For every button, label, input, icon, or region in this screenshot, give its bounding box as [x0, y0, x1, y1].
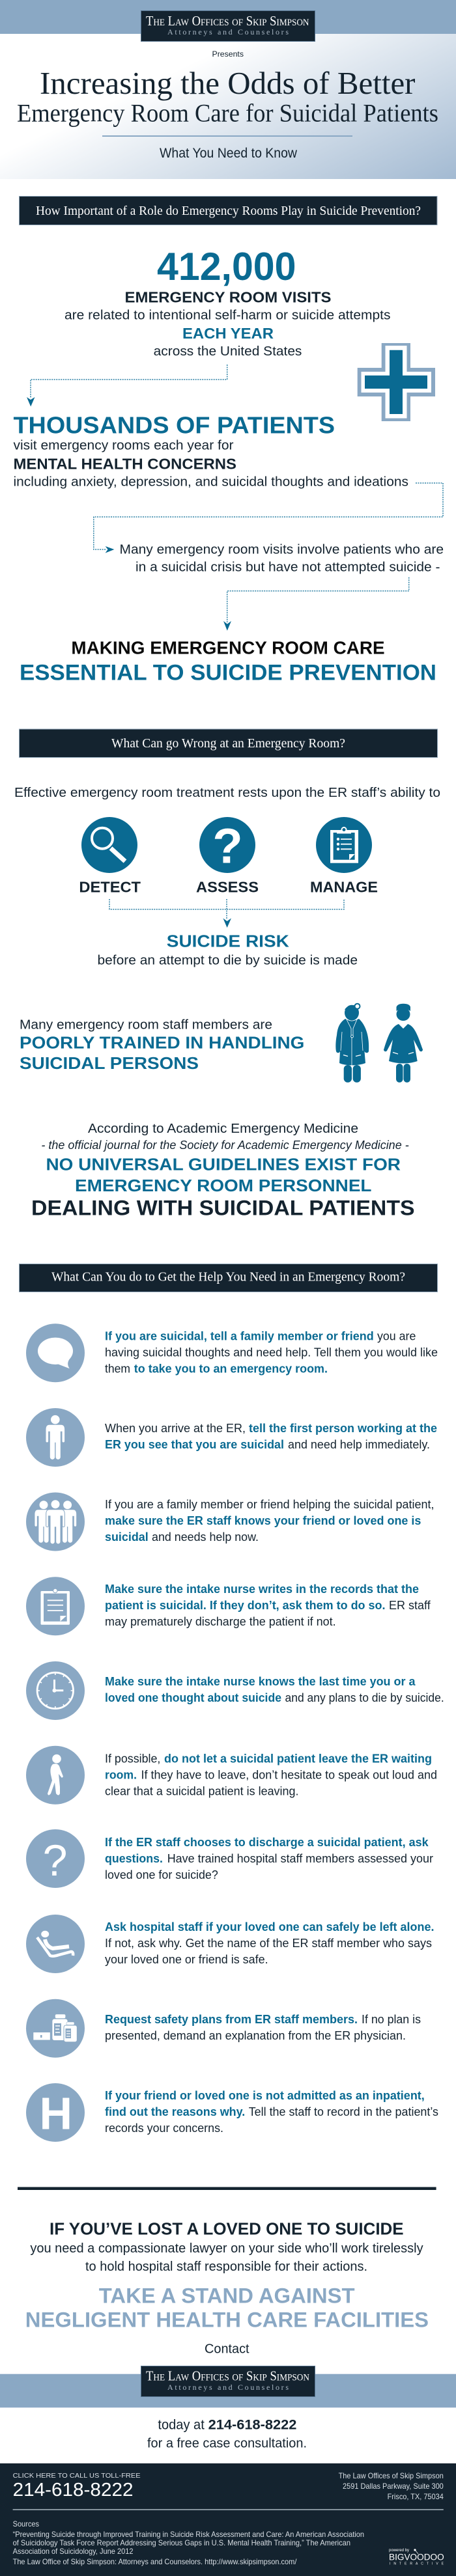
step 6: do not let patient leave [26, 1746, 437, 1805]
contact phone text: for a free case consultation. [147, 2437, 307, 2451]
section heading: what can go wrong: What Can go Wrong at an Emergency Room? [111, 736, 345, 751]
icon: nurse [384, 1004, 423, 1083]
step 3 text: suicidal [105, 1530, 149, 1544]
step 6 text: clear that a suicidal patient is leaving. [105, 1784, 298, 1797]
step 3 text [105, 1498, 434, 1544]
section heading: what can go wrong [20, 729, 438, 758]
step 10 text: If your friend or loved one is not admitted as an inpatient, [105, 2089, 425, 2102]
main title: Emergency Room Care for Suicidal Patients [17, 100, 438, 128]
logo: law offices: Attorneys and Counselors [167, 27, 289, 36]
step 3 text: and needs help now. [152, 1530, 259, 1544]
contact phone text: 214-618-8222 [208, 2418, 296, 2433]
step 10 text: Tell the staff to record in the patient’s [249, 2105, 438, 2118]
text: suicide risk: SUICIDE RISK [167, 931, 289, 950]
stat: 412,000 visits: across the United States [154, 344, 302, 359]
step 9: safety plans [26, 1999, 421, 2058]
section heading: what can you do [20, 1264, 438, 1292]
call to action text: Contact [205, 2342, 249, 2357]
step 4 text [105, 1583, 431, 1628]
step 2 text: tell the first person working at the [249, 1422, 437, 1435]
step 1 text: If you are suicidal, tell a family member or friend [105, 1329, 374, 1342]
step 1 text: you are [377, 1329, 416, 1342]
toll-free phone [13, 2472, 141, 2500]
address [339, 2471, 444, 2501]
step 6 text [105, 1752, 437, 1797]
step 2 text [105, 1422, 437, 1451]
icon: speech bubble [26, 1323, 85, 1382]
step 6 text: If they have to leave, don’t hesitate to speak out loud and [141, 1768, 437, 1781]
icon: assess question mark [199, 817, 255, 874]
step 1 text: having suicidal thoughts and need help. Tell them you would like [105, 1346, 438, 1359]
toll-free phone: 214-618-8222 [13, 2480, 133, 2500]
text: suicide risk [98, 931, 358, 968]
arrow: patients to crisis note [94, 483, 443, 553]
subtitle: What You Need to Know [160, 146, 298, 161]
icon: hospital letter H: H [40, 2088, 72, 2139]
sources: Association of Suicidology, June 2012 [13, 2547, 134, 2556]
stat: thousands of patients: including anxiety, depression, and suicidal thoughts and ideations [13, 475, 408, 490]
step 2 text: and need help immediately. [288, 1438, 430, 1451]
icon: doctor [335, 1004, 369, 1083]
logo: big voodoo interactive: BIGVOODOO [389, 2552, 444, 2562]
step 7 text: If the ER staff chooses to discharge a suicidal patient, ask [105, 1836, 429, 1849]
stat: 412,000 visits: EACH YEAR [182, 325, 274, 342]
sources [13, 2519, 364, 2566]
icon: person [26, 1408, 85, 1467]
call to action text [25, 2219, 429, 2357]
icon: reclining chair [26, 1915, 85, 1973]
icon: assess question mark: ? [212, 819, 243, 874]
step 2: tell first person at the ER [26, 1408, 437, 1467]
step 6 text: do not let a suicidal patient leave the ER waiting [164, 1752, 432, 1765]
step 8 text: Ask hospital staff if your loved one can safely be left alone. [105, 1920, 434, 1933]
step 4: intake nurse records [26, 1577, 431, 1635]
stat: 412,000 visits: 412,000 [157, 245, 296, 288]
arrow: three abilities to suicide risk [109, 899, 344, 928]
step 8 text: If not, ask why. Get the name of the ER staff member who says [105, 1937, 432, 1950]
stat: thousands of patients: MENTAL HEALTH CONCERNS [13, 456, 236, 473]
step 5 text: loved one thought about suicide [105, 1691, 281, 1704]
icon: clipboard [26, 1577, 85, 1635]
text: no universal guidelines [31, 1122, 415, 1220]
text: no universal guidelines: EMERGENCY ROOM PERSONNEL [75, 1176, 372, 1195]
text: no universal guidelines: NO UNIVERSAL GUIDELINES EXIST FOR [46, 1154, 401, 1174]
step 5: last suicidal thought [26, 1661, 444, 1720]
step 5 text: and any plans to die by suicide. [285, 1691, 444, 1704]
step 1: tell family or friend [26, 1323, 438, 1382]
arrow: crisis note to conclusion [223, 577, 409, 631]
text: no universal guidelines: DEALING WITH SUICIDAL PATIENTS [31, 1197, 415, 1220]
step 3: family member helping [26, 1492, 434, 1551]
presents label: Presents [212, 49, 244, 59]
address: 2591 Dallas Parkway, Suite 300 [343, 2482, 444, 2491]
icon: medicine bottles and razor [26, 1999, 85, 2058]
step 7 text [105, 1836, 433, 1881]
label: manage: MANAGE [310, 879, 378, 896]
step 2 text: ER you see that you are suicidal [105, 1438, 284, 1451]
label: detect: DETECT [79, 879, 141, 896]
step 1 text [105, 1329, 438, 1375]
step 3 text: make sure the ER staff knows your friend or loved one is [105, 1514, 421, 1527]
text: suicidal crisis note: in a suicidal crisis but have not attempted suicide - [135, 561, 440, 575]
step 7: ask questions on discharge [26, 1829, 433, 1888]
text: poorly trained staff: Many emergency room staff members are [20, 1018, 272, 1032]
conclusion heading: ESSENTIAL TO SUICIDE PREVENTION [20, 660, 436, 685]
icon: medical cross [358, 343, 435, 421]
icon: group of people [26, 1492, 85, 1551]
main title: Increasing the Odds of Better [40, 65, 416, 101]
step 3 text: If you are a family member or friend helping the suicidal patient, [105, 1498, 434, 1511]
step 4 text: patient is suicidal. If they don’t, ask them to do so. [105, 1599, 386, 1612]
text: no universal guidelines: - the official journal for the Society for Academic Emergency Medicine - [41, 1139, 409, 1152]
step 8 text: your loved one or friend is safe. [105, 1953, 268, 1966]
contact phone text [147, 2418, 307, 2451]
label: assess: ASSESS [196, 879, 259, 896]
step 9 text: presented, demand an explanation from the ER physician. [105, 2029, 406, 2042]
step 10: not admitted [26, 2083, 438, 2142]
step 7 text: loved one for suicide? [105, 1868, 218, 1881]
step 8 text [105, 1920, 434, 1966]
call to action text: NEGLIGENT HEALTH CARE FACILITIES [25, 2308, 429, 2331]
section heading: what can you do: What Can You do to Get the Help You Need in an Emergency Room? [51, 1270, 405, 1284]
text: suicidal crisis note [120, 543, 444, 575]
text: poorly trained staff: POORLY TRAINED IN HANDLING [20, 1033, 304, 1053]
text: no universal guidelines: According to Academic Emergency Medicine [88, 1122, 358, 1136]
stat: 412,000 visits: EMERGENCY ROOM VISITS [125, 289, 331, 306]
footer panel [0, 2463, 456, 2576]
contact band with logo [0, 2366, 456, 2407]
toll-free phone: CLICK HERE TO CALL US TOLL-FREE [13, 2472, 141, 2480]
sources: The Law Office of Skip Simpson: Attorneys and Counselors. http://www.skipsimpson.com/ [13, 2557, 297, 2566]
text: poorly trained staff [20, 1018, 304, 1073]
sources: “Preventing Suicide through Improved Training in Suicide Risk Assessment and Care: An American Association [13, 2530, 364, 2539]
header panel [0, 0, 456, 179]
step 10 text [105, 2089, 438, 2135]
step 10 text: find out the reasons why. [105, 2105, 245, 2118]
text: suicidal crisis note: Many emergency room visits involve patients who are [120, 543, 444, 557]
call to action text: IF YOU’VE LOST A LOVED ONE TO SUICIDE [50, 2219, 404, 2239]
stat: 412,000 visits: are related to intentional self-harm or suicide attempts [64, 309, 391, 323]
icon: question mark [26, 1829, 85, 1888]
text: suicide risk: before an attempt to die by suicide is made [98, 954, 358, 968]
arrow: visits to patients [27, 365, 227, 406]
stat: thousands of patients [13, 411, 408, 490]
step 8: left alone [26, 1915, 434, 1973]
logo: law offices [141, 10, 315, 42]
text: poorly trained staff: SUICIDAL PERSONS [20, 1053, 199, 1073]
icon: question mark: ? [43, 1836, 67, 1885]
step 4 text: Make sure the intake nurse writes in the records that the [105, 1583, 419, 1596]
sources: Sources [13, 2519, 39, 2528]
section heading: role of emergency rooms: How Important of a Role do Emergency Rooms Play in Suicide Prevention? [36, 204, 421, 218]
contact band with logo: Attorneys and Counselors [167, 2383, 289, 2392]
logo: big voodoo interactive [389, 2548, 444, 2566]
call to action text: you need a compassionate lawyer on your side who’ll work tirelessly [30, 2241, 423, 2256]
call to action text: to hold hospital staff responsible for their actions. [85, 2260, 367, 2274]
icon: walking person [26, 1746, 85, 1805]
step 10 text: records your concerns. [105, 2122, 223, 2135]
step 1 text: them [105, 1362, 130, 1375]
address: The Law Offices of Skip Simpson [339, 2471, 444, 2480]
step 9 text: If no plan is [362, 2013, 421, 2026]
sources: of Suicidology Task Force Report Addressing Serious Gaps in U.S. Mental Health Training,” The American [13, 2538, 350, 2547]
step 7 text: questions. [105, 1852, 163, 1865]
call to action text: TAKE A STAND AGAINST [99, 2284, 355, 2307]
stat: thousands of patients: THOUSANDS OF PATIENTS [13, 411, 335, 438]
stat: 412,000 visits [64, 245, 391, 359]
conclusion heading [20, 638, 436, 685]
logo: big voodoo interactive: powered by [389, 2548, 410, 2553]
step 6 text: room. [105, 1768, 137, 1781]
step 9 text: Request safety plans from ER staff members. [105, 2013, 358, 2026]
step 4 text: ER staff [389, 1599, 431, 1612]
step 9 text [105, 2013, 421, 2042]
icon: manage clipboard [316, 817, 372, 873]
icon: hospital letter H [26, 2083, 85, 2142]
intro text: staff ability: Effective emergency room treatment rests upon the ER staff’s ability to [14, 786, 440, 800]
contact band with logo: The Law Offices of Skip Simpson [146, 2368, 309, 2384]
step 4 text: may prematurely discharge the patient if not. [105, 1615, 336, 1628]
contact phone text: today at [158, 2418, 205, 2433]
address: Frisco, TX, 75034 [388, 2492, 444, 2501]
logo: law offices: The Law Offices of Skip Simpson [146, 13, 309, 29]
step 1 text: to take you to an emergency room. [134, 1362, 328, 1375]
step 6 text: If possible, [105, 1752, 160, 1765]
icon: clock [26, 1661, 85, 1720]
step 5 text [105, 1675, 444, 1704]
section heading: role of emergency rooms [20, 197, 437, 225]
stat: thousands of patients: visit emergency rooms each year for [13, 439, 234, 453]
logo: big voodoo interactive: INTERACTIVE [390, 2562, 444, 2566]
icon: detect magnifier [81, 817, 137, 873]
step 2 text: When you arrive at the ER, [105, 1422, 246, 1435]
step 7 text: Have trained hospital staff members assessed your [167, 1852, 433, 1865]
main title [17, 65, 438, 128]
step 5 text: Make sure the intake nurse knows the last time you or a [105, 1675, 416, 1688]
conclusion heading: MAKING EMERGENCY ROOM CARE [71, 638, 385, 658]
